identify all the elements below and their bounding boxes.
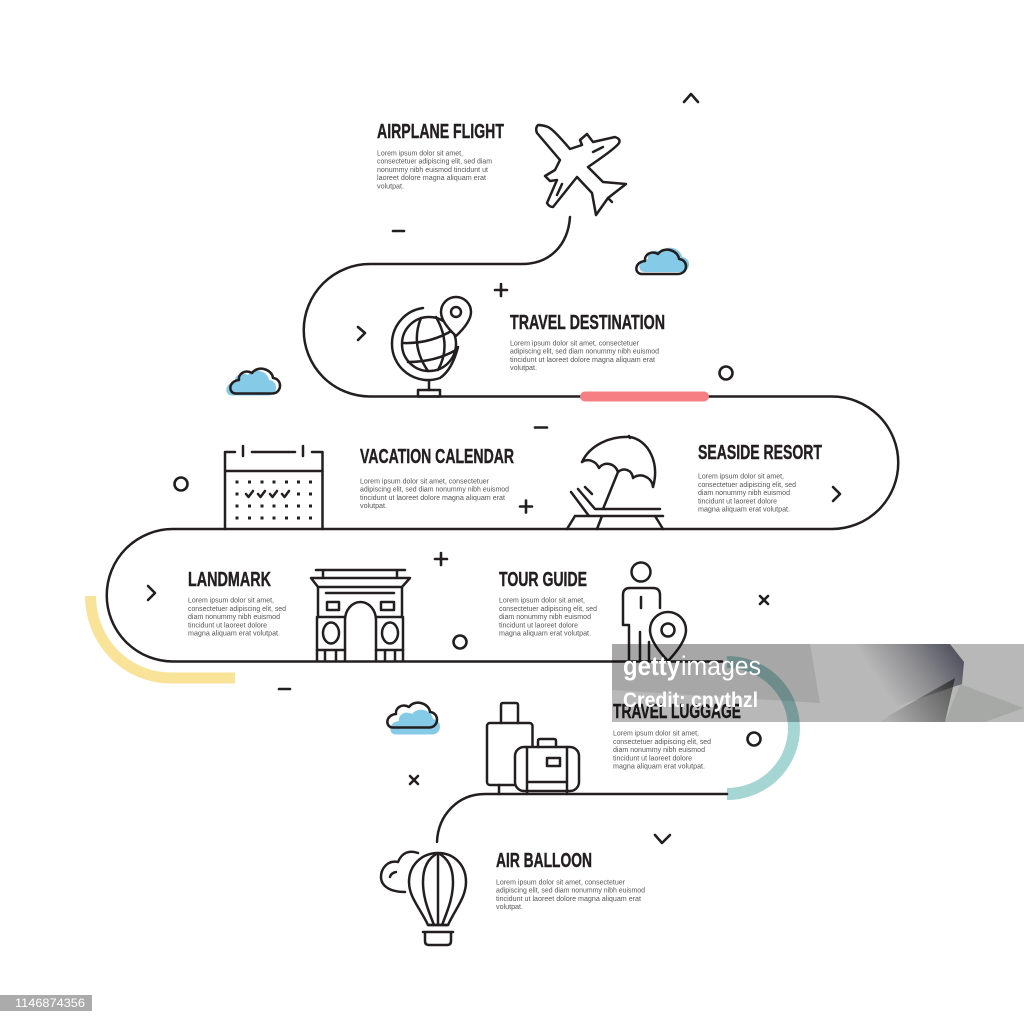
heading: vacation calendar: VACATION CALENDAR <box>360 446 514 468</box>
text block: air balloon: adipiscing elit, sed diam nonummy nibh euismod <box>496 888 645 895</box>
watermark logo <box>623 651 761 681</box>
icon: luggage <box>487 703 579 794</box>
text block: tour guide: Lorem ipsum dolor sit amet, <box>499 598 585 604</box>
text block: vacation calendar <box>360 478 509 510</box>
text block: air balloon: Lorem ipsum dolor sit amet, consectetuer <box>496 880 626 886</box>
heading: travel luggage: TRAVEL LUGGAGE <box>613 701 741 723</box>
panel: seaside resort <box>567 436 822 529</box>
heading: airplane flight: AIRPLANE FLIGHT <box>377 121 504 143</box>
icon: triumphal arch <box>311 570 410 661</box>
text block: landmark: consectetuer adipiscing elit, sed <box>188 606 286 613</box>
text block: seaside resort: diam nonummy nibh euismod <box>698 490 790 497</box>
text block: air balloon <box>496 880 645 911</box>
panel: tour guide <box>499 562 686 661</box>
cloud: lower <box>387 703 440 734</box>
text block: air balloon: volutpat. <box>496 904 523 911</box>
text block: tour guide: tincidunt ut laoreet dolore <box>499 622 578 629</box>
cloud: upper right <box>636 248 689 274</box>
text block: airplane flight: laoreet dolore magna aliquam erat <box>377 175 486 182</box>
decorative markers <box>148 94 840 843</box>
panel: landmark <box>188 569 410 661</box>
text block: travel destination <box>510 340 659 372</box>
text block: landmark: Lorem ipsum dolor sit amet, <box>188 598 274 604</box>
text block: tour guide: magna aliquam erat volutpat. <box>499 630 591 638</box>
panel: vacation calendar <box>225 446 514 529</box>
text block: air balloon: tincidunt ut laoreet dolore magna aliquam erat <box>496 896 641 903</box>
panel: airplane flight <box>377 121 626 215</box>
text block: vacation calendar: tincidunt ut laoreet dolore magna aliquam erat <box>360 495 505 502</box>
text block: landmark: magna aliquam erat volutpat. <box>188 630 280 638</box>
heading: air balloon: AIR BALLOON <box>496 850 592 872</box>
heading: tour guide: TOUR GUIDE <box>499 569 587 591</box>
text block: travel luggage: Lorem ipsum dolor sit amet, <box>613 730 699 738</box>
text block: landmark: diam nonummy nibh euismod <box>188 614 280 621</box>
icon: calendar <box>225 446 322 529</box>
text block: travel destination: Lorem ipsum dolor sit amet, consectetuer <box>510 340 640 348</box>
text block: landmark <box>188 598 286 638</box>
text block: seaside resort: magna aliquam erat volutpat. <box>698 506 790 514</box>
watermark logo: images <box>681 651 761 681</box>
text block: tour guide <box>499 598 597 638</box>
text block: seaside resort: consectetuer adipiscing elit, sed <box>698 482 796 489</box>
text block: airplane flight: Lorem ipsum dolor sit amet, <box>377 150 463 158</box>
text block: airplane flight: consectetuer adipiscing elit, sed diam <box>377 159 492 166</box>
text block: seaside resort: tincidunt ut laoreet dolore <box>698 498 777 505</box>
watermark credit: Credit: cnythzl <box>623 689 758 712</box>
text block: airplane flight: volutpat. <box>377 184 404 190</box>
watermark logo: getty <box>623 651 680 681</box>
image id label <box>0 995 92 1011</box>
text block: airplane flight: nonummy nibh euismod tincidunt ut <box>377 167 488 174</box>
route line <box>107 217 898 842</box>
text block: travel destination: tincidunt ut laoreet dolore magna aliquam erat <box>510 357 655 364</box>
text block: travel luggage: consectetuer adipiscing elit, sed <box>613 739 711 746</box>
text block: vacation calendar: Lorem ipsum dolor sit amet, consectetuer <box>360 478 490 486</box>
pink highlight bar <box>580 392 709 402</box>
text block: tour guide: consectetuer adipiscing elit, sed <box>499 606 597 613</box>
text block: vacation calendar: adipiscing elit, sed diam nonummy nibh euismod <box>360 487 509 494</box>
yellow accent arc <box>90 596 235 678</box>
cloud: left <box>226 369 280 396</box>
text block: travel luggage <box>613 730 711 770</box>
text block: travel destination: adipiscing elit, sed diam nonummy nibh euismod <box>510 349 659 356</box>
heading: travel destination: TRAVEL DESTINATION <box>510 312 665 334</box>
heading: landmark: LANDMARK <box>188 569 271 591</box>
watermark band <box>612 644 1024 722</box>
text block: travel luggage: magna aliquam erat volutpat. <box>613 764 705 770</box>
text block: seaside resort <box>698 474 796 514</box>
icon: hot air balloon with cloud <box>381 852 466 945</box>
text block: tour guide: diam nonummy nibh euismod <box>499 614 591 621</box>
text block: travel destination: volutpat. <box>510 365 537 372</box>
text block: landmark: tincidunt ut laoreet dolore <box>188 622 267 629</box>
text block: seaside resort: Lorem ipsum dolor sit amet, <box>698 474 784 480</box>
teal accent arc <box>727 662 794 794</box>
heading: seaside resort: SEASIDE RESORT <box>698 442 822 464</box>
text block: airplane flight <box>377 150 492 190</box>
text block: travel luggage: diam nonummy nibh euismod <box>613 747 705 754</box>
icon: beach umbrella and lounger <box>567 436 663 529</box>
icon: globe with pin <box>392 297 471 396</box>
text block: travel luggage: tincidunt ut laoreet dolore <box>613 755 692 762</box>
panel: air balloon <box>381 850 645 945</box>
panel: travel destination <box>392 297 665 396</box>
text block: vacation calendar: volutpat. <box>360 503 387 510</box>
icon: airplane <box>536 125 626 215</box>
image id label: 1146874356 <box>15 996 85 1010</box>
icon: guide person with pin <box>623 562 686 661</box>
panel: travel luggage <box>487 701 741 794</box>
